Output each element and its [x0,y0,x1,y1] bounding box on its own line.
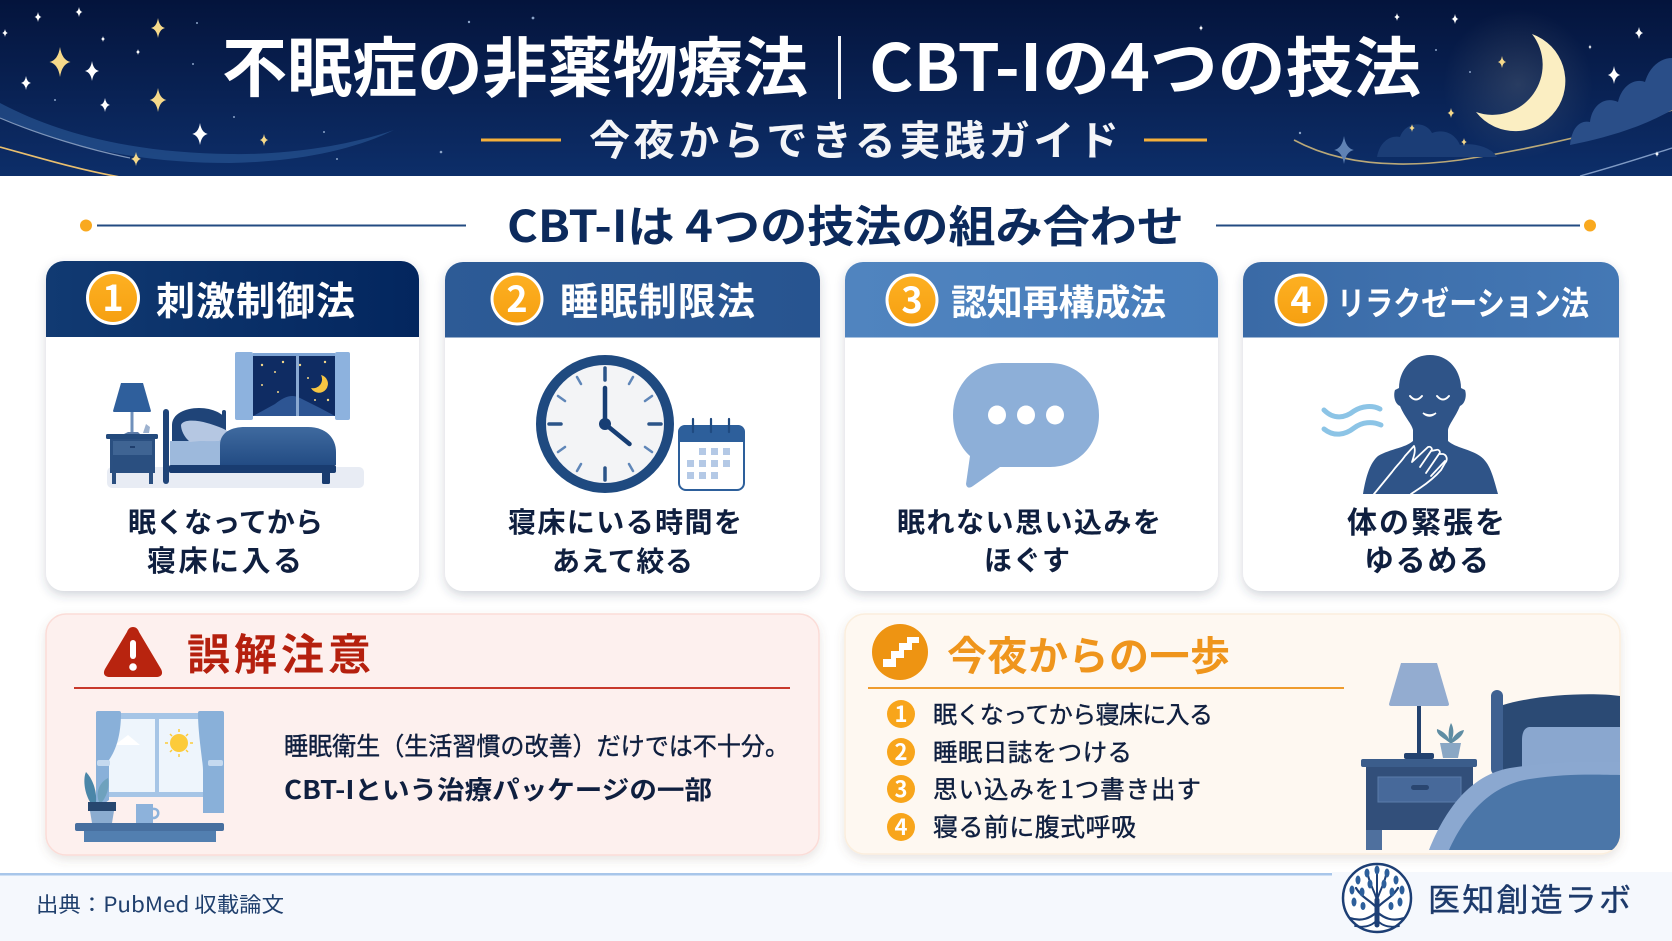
warning text [284,727,789,807]
card caption: ゆるめる [1364,536,1489,580]
card header [1243,262,1619,338]
panel: 刺激制御法 [46,261,419,591]
warning text: CBT-Iという治療パッケージの一部 [284,770,712,807]
number badge 1 [86,270,140,325]
step 3: 3 [895,772,907,804]
footer [0,864,1672,941]
number badge 4 [1274,272,1328,326]
source note: 出典：PubMed 収載論文 [36,889,284,919]
card caption [128,501,323,580]
section heading [80,191,1596,255]
step 1: 眠くなってから寝床に入る [933,695,1213,730]
card title: リラクゼーション法 [1337,277,1589,325]
title: CBT-Iの4つの技法 [869,16,1421,110]
icon: bedroom [106,352,364,488]
step 3: 思い込みを1つ書き出す [933,771,1201,806]
logo wordmark: 医知創造ラボ [1428,875,1631,921]
illustration: window [75,711,224,842]
subtitle: 今夜からできる実践ガイド [589,107,1119,167]
step 2: 睡眠日誌をつける [933,734,1132,769]
panel: 睡眠制限法 [445,262,820,591]
card caption [508,501,742,580]
number badge 2: 2 [506,271,528,323]
card header [845,262,1218,338]
step list [887,695,1213,844]
card caption: 眠れない思い込みを [897,501,1161,541]
number badge 4: 4 [1290,272,1312,324]
header banner [0,0,1672,177]
step 2: 2 [895,735,907,767]
card caption: あえて絞る [552,540,693,580]
card title: 認知再構成法 [951,274,1166,326]
card caption: 体の緊張を [1347,498,1505,542]
icon: clock and calendar [541,360,745,490]
panel: 認知再構成法 [845,262,1218,591]
panel: リラクゼーション法 [1243,262,1619,591]
number badge 3: 3 [901,272,923,324]
number badge 2 [490,271,544,326]
card caption [1347,498,1505,580]
card caption: 寝床に入る [147,538,302,580]
step 4: 4 [895,810,908,842]
card caption: ほぐす [984,539,1070,579]
step 1: 1 [895,697,907,729]
card header [46,261,419,337]
night sky decoration [0,7,1672,177]
number badge 3 [886,272,938,326]
icon: stairs [872,624,928,680]
panel: 今夜からの一歩 [845,614,1620,854]
step 4: 寝る前に腹式呼吸 [933,808,1136,844]
card caption: 眠くなってから [128,501,323,541]
section heading: CBT-Iは 4つの技法の組み合わせ [507,191,1184,255]
panel: 誤解注意 [46,614,819,855]
heading: 今夜からの一歩 [947,624,1230,682]
number badge 1: 1 [102,270,124,322]
card header [445,262,820,338]
card title: 睡眠制限法 [560,271,755,326]
card title: 刺激制御法 [156,271,355,327]
illustration: bedside [1361,663,1620,850]
logo [1343,864,1631,932]
card caption: 寝床にいる時間を [508,501,742,541]
warning text: 睡眠衛生（生活習慣の改善）だけでは不十分。 [284,727,789,763]
heading: 誤解注意 [187,621,371,683]
icon: warning triangle [104,627,162,677]
title: 不眠症の非薬物療法 [222,16,808,110]
title [222,16,1421,110]
card caption [897,501,1161,579]
icon: speech bubble [953,363,1099,488]
icon: relaxed person breathing [1324,355,1498,494]
